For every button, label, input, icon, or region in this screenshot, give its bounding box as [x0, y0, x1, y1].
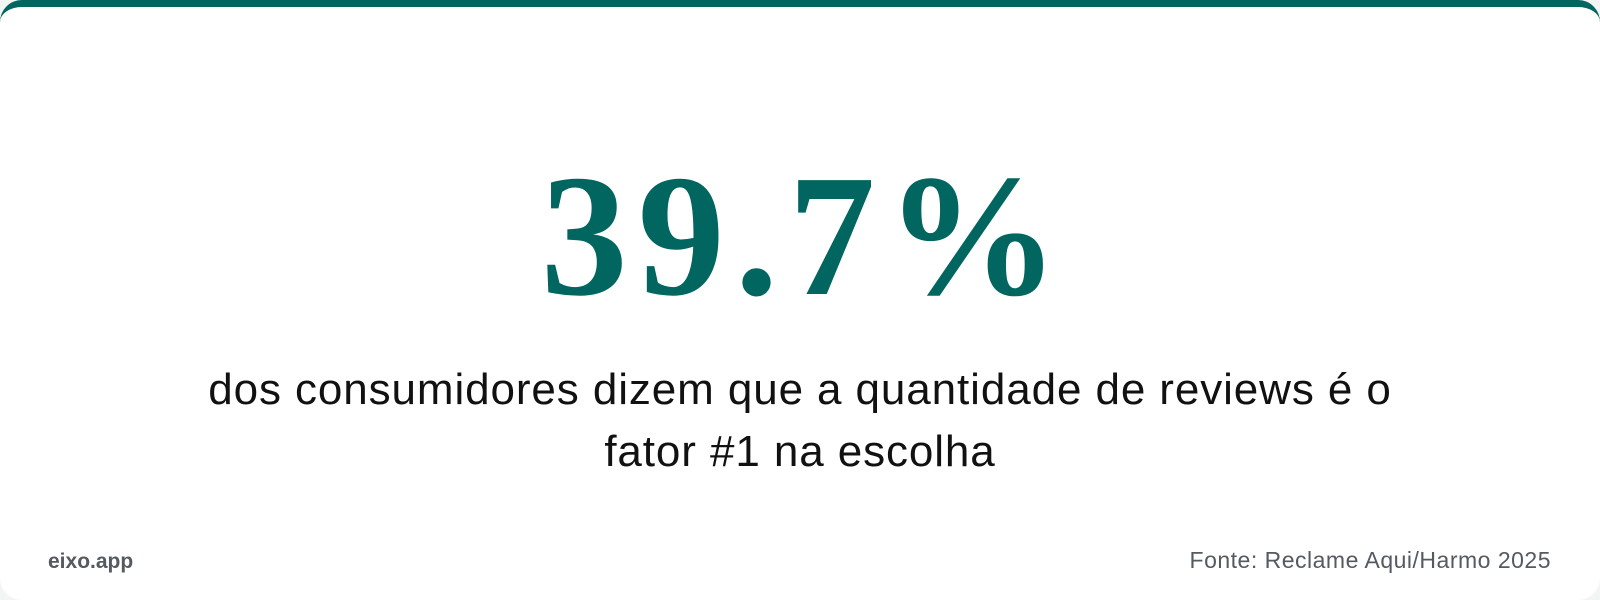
source: Fonte: Reclame Aqui/Harmo 2025 [1190, 547, 1551, 573]
description text [208, 365, 1392, 476]
brand: eixo.app [48, 550, 133, 573]
big statistic: 39.7% [541, 139, 1069, 332]
description text: fator #1 na escolha [604, 427, 996, 476]
description text: dos consumidores dizem que a quantidade de reviews é o [208, 365, 1392, 414]
